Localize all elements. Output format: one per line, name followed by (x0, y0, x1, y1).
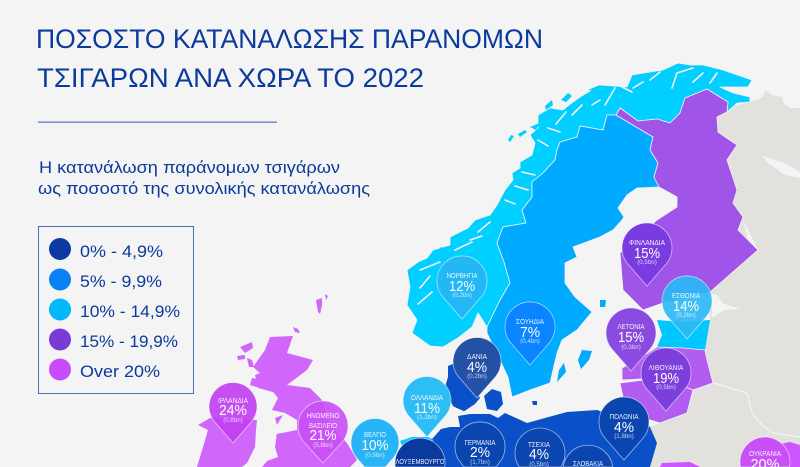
gulf of Finland (712, 294, 740, 318)
legend item: 15-19.9% (49, 328, 178, 351)
country: Germany and Poland (405, 410, 657, 467)
Norwegian fjords (418, 68, 717, 304)
pin: United Kingdom: (5,9bn) (313, 442, 333, 449)
pin: Denmark (453, 337, 501, 398)
pin: Ukraine: ΟΥΚΡΑΝΙΑ (749, 451, 781, 458)
pin: Finland: ΦΙΝΛΑΝΔΙΑ (629, 240, 665, 247)
legend (38, 226, 194, 394)
map of Europe (197, 63, 800, 467)
pin: Belgium: ΒΕΛΓΙΟ (364, 432, 386, 439)
legend item: 10-14.9% (49, 298, 180, 321)
country: Estonia (657, 320, 710, 350)
pin: Denmark: ΔΑΝΙΑ (467, 354, 487, 361)
Norwegian islands (440, 85, 600, 251)
pin: Czechia (515, 428, 565, 467)
pin: Latvia: 15% (618, 329, 644, 346)
legend item: over 20% (49, 358, 160, 381)
country: Norway (407, 63, 752, 347)
legend item: 5-9.9%: 5% - 9,9% (80, 272, 162, 291)
pin: Germany: (1,7bn) (470, 459, 490, 466)
Gotland and Oland islands (557, 300, 606, 382)
subtitle: ως ποσοστό της συνολικής κατανάλωσης (38, 179, 370, 198)
pin: Netherlands (403, 376, 451, 437)
pin: Czechia: 4% (529, 446, 549, 463)
country: Sweden (487, 115, 659, 397)
pin: Norway: (0,2bn) (452, 292, 472, 299)
border: Belarus and Ukraine (713, 383, 800, 437)
title: ΤΣΙΓΑΡΩΝ ΑΝΑ ΧΩΡΑ ΤΟ 2022 (37, 63, 424, 93)
pin: Luxembourg (395, 438, 445, 467)
pin: Belgium: (0,9bn) (365, 452, 385, 459)
title: ΠΟΣΟΣΤΟ ΚΑΤΑΝΑΛΩΣΗΣ ΠΑΡΑΝΟΜΩΝ (36, 24, 543, 54)
subtitle (38, 158, 370, 198)
country: Russia and eastern neighbours (650, 90, 800, 467)
pin: Lithuania: ΛΙΘΟΥΑΝΙΑ (648, 365, 684, 372)
subtitle: Η κατανάλωση παράνομων τσιγάρων (39, 158, 340, 177)
pin: Estonia: (0,2bn) (676, 312, 696, 319)
pin: Estonia: ΕΣΘΟΝΙΑ (672, 293, 700, 300)
pin: Netherlands: (1,2bn) (417, 414, 437, 421)
pin: Norway: 12% (449, 278, 475, 295)
country: Ukraine (660, 442, 800, 467)
pin: Finland (622, 223, 672, 286)
pin: Sweden: 7% (520, 324, 540, 341)
pin: Denmark: (0,2bn) (467, 373, 487, 380)
country: United Kingdom (253, 336, 357, 467)
pin: Poland (599, 397, 649, 460)
pin: Ukraine (740, 437, 790, 467)
pin: Poland: ΠΟΛΩΝΙΑ (610, 414, 639, 421)
pin: Norway (437, 256, 487, 319)
pin: Latvia (606, 308, 656, 371)
legend item: 10-14.9%: 10% - 14,9% (80, 302, 180, 321)
country: Latvia (622, 347, 713, 390)
legend item: over 20%: Over 20% (80, 362, 160, 381)
pin: Germany: ΓΕΡΜΑΝΙΑ (464, 440, 496, 447)
Scottish islands and Shetland (237, 294, 328, 440)
pin: Czechia: ΤΣΕΧΙΑ (528, 442, 550, 449)
pin: United Kingdom: 21% (310, 427, 336, 444)
pin: Slovakia (563, 445, 613, 467)
title (36, 24, 543, 93)
pin: Belgium: 10% (362, 437, 388, 454)
pin: Sweden: ΣΟΥΗΔΙΑ (516, 319, 544, 326)
country: Ireland (197, 418, 257, 467)
legend item: 15-19.9%: 15% - 19,9% (80, 332, 178, 351)
pin: Sweden: (0,4bn) (520, 338, 540, 345)
pin: Finland: 15% (634, 245, 660, 262)
pin: United Kingdom (298, 401, 348, 463)
pin: Lithuania: (0,5bn) (656, 384, 676, 391)
pin: Finland: (0,5bn) (637, 259, 657, 266)
pin: Lithuania: 19% (653, 370, 679, 387)
pin: Netherlands: ΟΛΛΑΝΔΙΑ (411, 395, 443, 402)
pin: Sweden (505, 302, 555, 365)
lake Ladoga area (762, 156, 800, 178)
pin: Ireland: ΙΡΛΑΝΔΙΑ (218, 398, 248, 405)
Danish-German border (453, 407, 467, 413)
pin: Luxembourg: ΛΟΥΞΕΜΒΟΥΡΓΟ (396, 459, 445, 466)
legend item: 0-4.9%: 0% - 4,9% (80, 242, 163, 261)
pin: Poland: 4% (614, 419, 634, 436)
pin: Estonia: 14% (673, 298, 699, 315)
pin: Belgium (351, 418, 399, 467)
pin: Norway: ΝΟΡΒΗΓΙΑ (446, 273, 478, 280)
pin: Denmark: 4% (467, 359, 487, 376)
legend item: 0-4.9% (49, 238, 163, 261)
pin: Netherlands: 11% (414, 400, 440, 417)
pin: Latvia: ΛΕΤΟΝΙΑ (618, 324, 645, 331)
country: Finland (616, 89, 758, 310)
pin: Lithuania (641, 348, 691, 411)
country: Denmark (445, 362, 537, 412)
country: Lithuania (620, 378, 693, 423)
pin: United Kingdom: ΗΝΩΜΕΝΟ (306, 413, 340, 420)
pin: United Kingdom: ΒΑΣΙΛΕΙΟ (309, 423, 337, 430)
pin: Ireland (209, 382, 257, 443)
pin: Ireland: 24% (219, 402, 247, 419)
pin: Latvia: (0,3bn) (621, 344, 641, 351)
pin: Germany: 2% (470, 444, 490, 461)
legend item: 5-9.9% (49, 268, 162, 291)
country: Netherlands (400, 437, 434, 452)
pin: Ireland: (0,8bn) (223, 417, 243, 424)
pin: Poland: (1,8bn) (614, 433, 634, 440)
pin: Estonia (662, 276, 712, 339)
pin: Germany (455, 422, 505, 467)
